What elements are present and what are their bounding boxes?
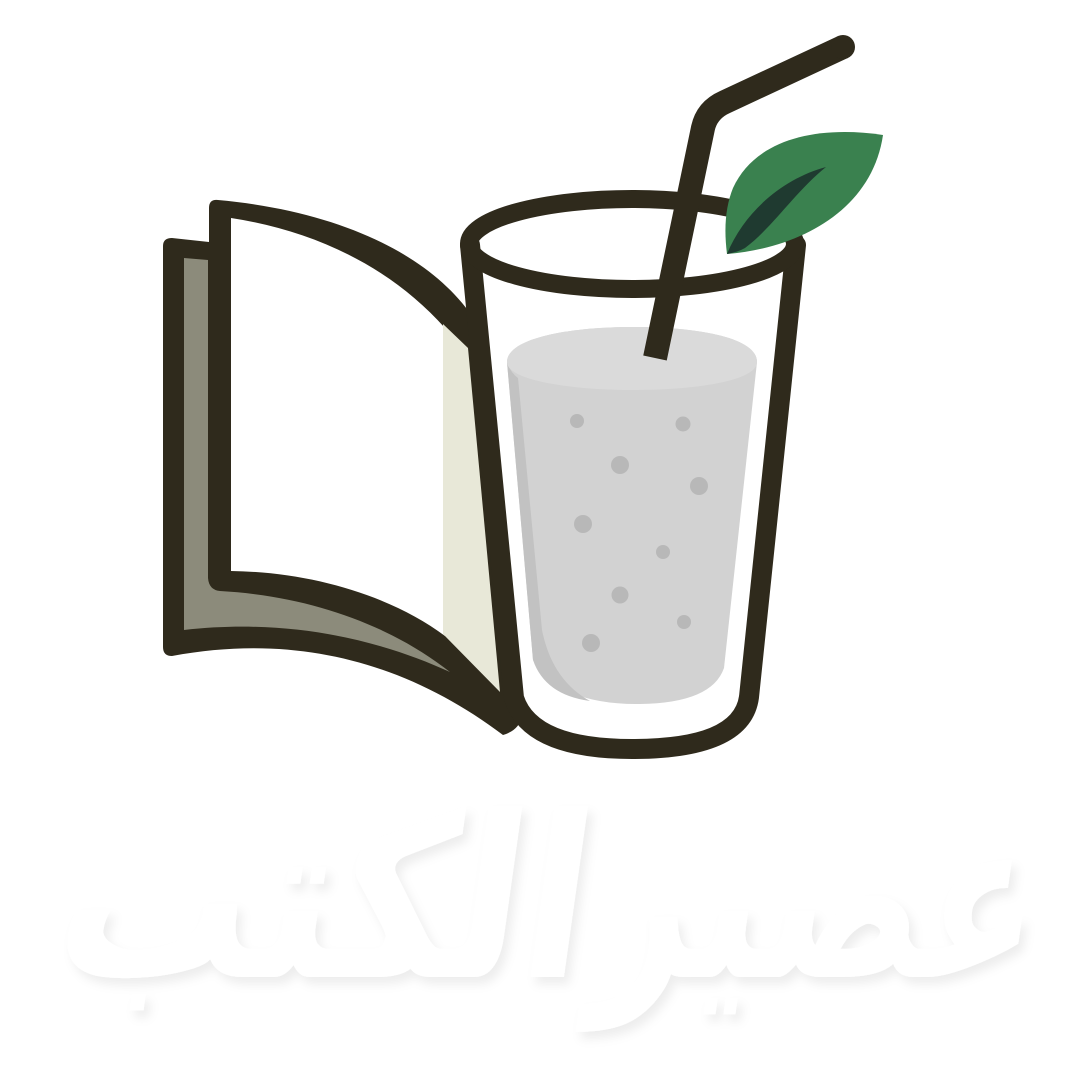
back page fill <box>184 258 450 672</box>
word: books: الكتب <box>42 769 609 1031</box>
juice <box>507 327 757 704</box>
leaf vein <box>727 167 826 254</box>
icon: leaf <box>725 132 883 254</box>
glass outline <box>470 245 796 749</box>
juice surface <box>507 327 757 390</box>
wordmark: brand name <box>42 769 1059 1033</box>
glass rim <box>469 199 795 289</box>
straw <box>655 47 843 358</box>
inner page shadow <box>443 324 500 692</box>
glass interior <box>470 245 796 749</box>
juice shadow side <box>507 362 590 701</box>
front page <box>231 218 445 636</box>
icon: glass of juice <box>469 35 855 749</box>
book silhouette outline <box>163 200 522 735</box>
juice bubbles <box>570 414 708 652</box>
leaf blade <box>725 132 883 254</box>
icon: open book <box>163 200 522 735</box>
straw tip <box>831 35 855 59</box>
